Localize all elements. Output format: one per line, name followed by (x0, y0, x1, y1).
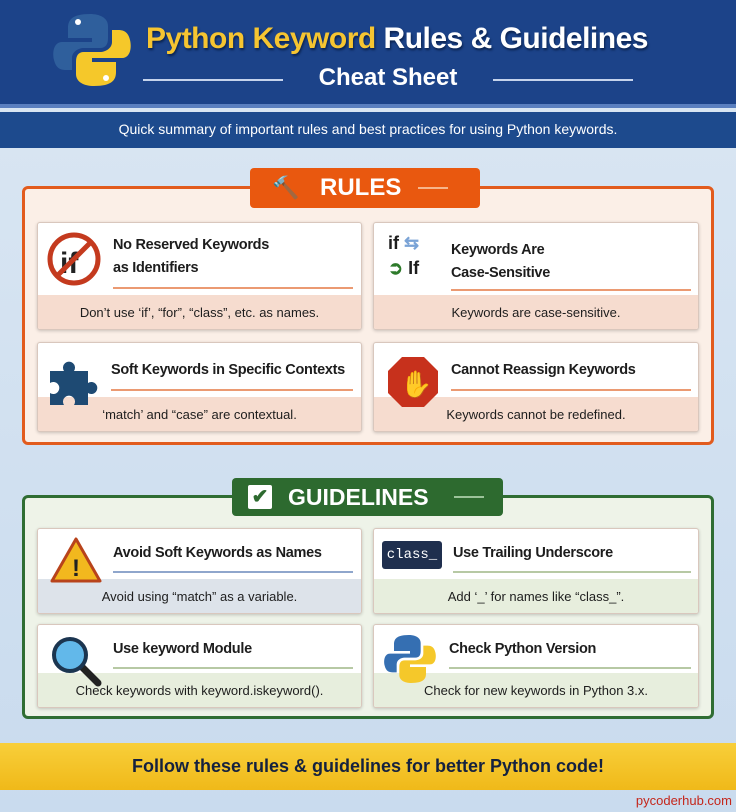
panel: guidelines (22, 495, 714, 719)
icon: class_ (382, 541, 442, 569)
icon: no if (48, 232, 100, 286)
icon: python logo (53, 14, 131, 86)
icon: if/If: ➲ If (388, 258, 419, 278)
card: trailing underscore: Use Trailing Underscore (453, 545, 613, 561)
title: Python Keyword Rules & Guidelines (146, 22, 648, 55)
heading: guidelines (232, 478, 503, 516)
website credit: pycoderhub.com (636, 793, 732, 808)
icon: warning (50, 537, 102, 582)
card: avoid soft keywords (37, 528, 362, 614)
heading: rules: RULES (320, 174, 401, 201)
icon: magnifier (52, 637, 102, 686)
heading: rules: 🔨 (272, 175, 299, 200)
card: soft keywords: ‘match’ and “case” are contextual. (102, 407, 297, 422)
icon: stop hand: ✋ (400, 369, 432, 399)
card: cannot reassign: Keywords cannot be redefined. (446, 407, 626, 422)
card: no reserved keywords: as Identifiers (113, 260, 198, 276)
card: python version: Check for new keywords in Python 3.x. (424, 683, 648, 698)
card: keyword module (37, 624, 362, 708)
icon: puzzle (50, 362, 98, 405)
intro text band (0, 112, 736, 148)
heading: rules (250, 168, 480, 208)
card: case-sensitive (373, 222, 699, 330)
header band (0, 0, 736, 108)
card: case-sensitive: Keywords Are (451, 242, 544, 258)
card: no reserved keywords (37, 222, 362, 330)
heading: guidelines: GUIDELINES (288, 484, 429, 510)
subtitle: cheat sheet: Cheat Sheet (319, 64, 457, 91)
card: cannot reassign (373, 342, 699, 432)
icon: stop hand (388, 357, 438, 407)
card: python version (373, 624, 699, 708)
intro text band: Quick summary of important rules and best practices for using Python keywords. (119, 121, 617, 137)
card: trailing underscore: Add ‘_’ for names like “class_”. (448, 589, 624, 604)
card: trailing underscore (373, 528, 699, 614)
icon: if/If (388, 233, 420, 278)
card: avoid soft keywords: Avoid using “match” as a variable. (102, 589, 297, 604)
footer banner: Follow these rules & guidelines for better Python code! (132, 756, 604, 776)
card: cannot reassign: Cannot Reassign Keywords (451, 362, 636, 378)
card: python version: Check Python Version (449, 641, 596, 657)
card: keyword module: Use keyword Module (113, 641, 252, 657)
card: keyword module: Check keywords with keyword.iskeyword(). (76, 683, 323, 698)
card: no reserved keywords: No Reserved Keywords (113, 237, 269, 253)
icon: class_: class_ (387, 547, 437, 563)
icon: python logo small (384, 635, 436, 683)
card: soft keywords: Soft Keywords in Specific Contexts (111, 362, 345, 378)
card: case-sensitive: Keywords are case-sensitive. (451, 305, 621, 320)
card: soft keywords (37, 342, 362, 432)
footer banner (0, 743, 736, 790)
icon: no if: if (60, 247, 79, 280)
card: case-sensitive: Case-Sensitive (451, 265, 550, 281)
card: no reserved keywords: Don’t use ‘if’, “for”, “class”, etc. as names. (80, 305, 319, 320)
card: avoid soft keywords: Avoid Soft Keywords as Names (113, 545, 322, 561)
panel: rules (22, 186, 714, 445)
icon: warning: ! (72, 555, 80, 582)
heading: guidelines: ✔ (252, 486, 268, 508)
icon: if/If: if ⇆ (388, 233, 419, 253)
